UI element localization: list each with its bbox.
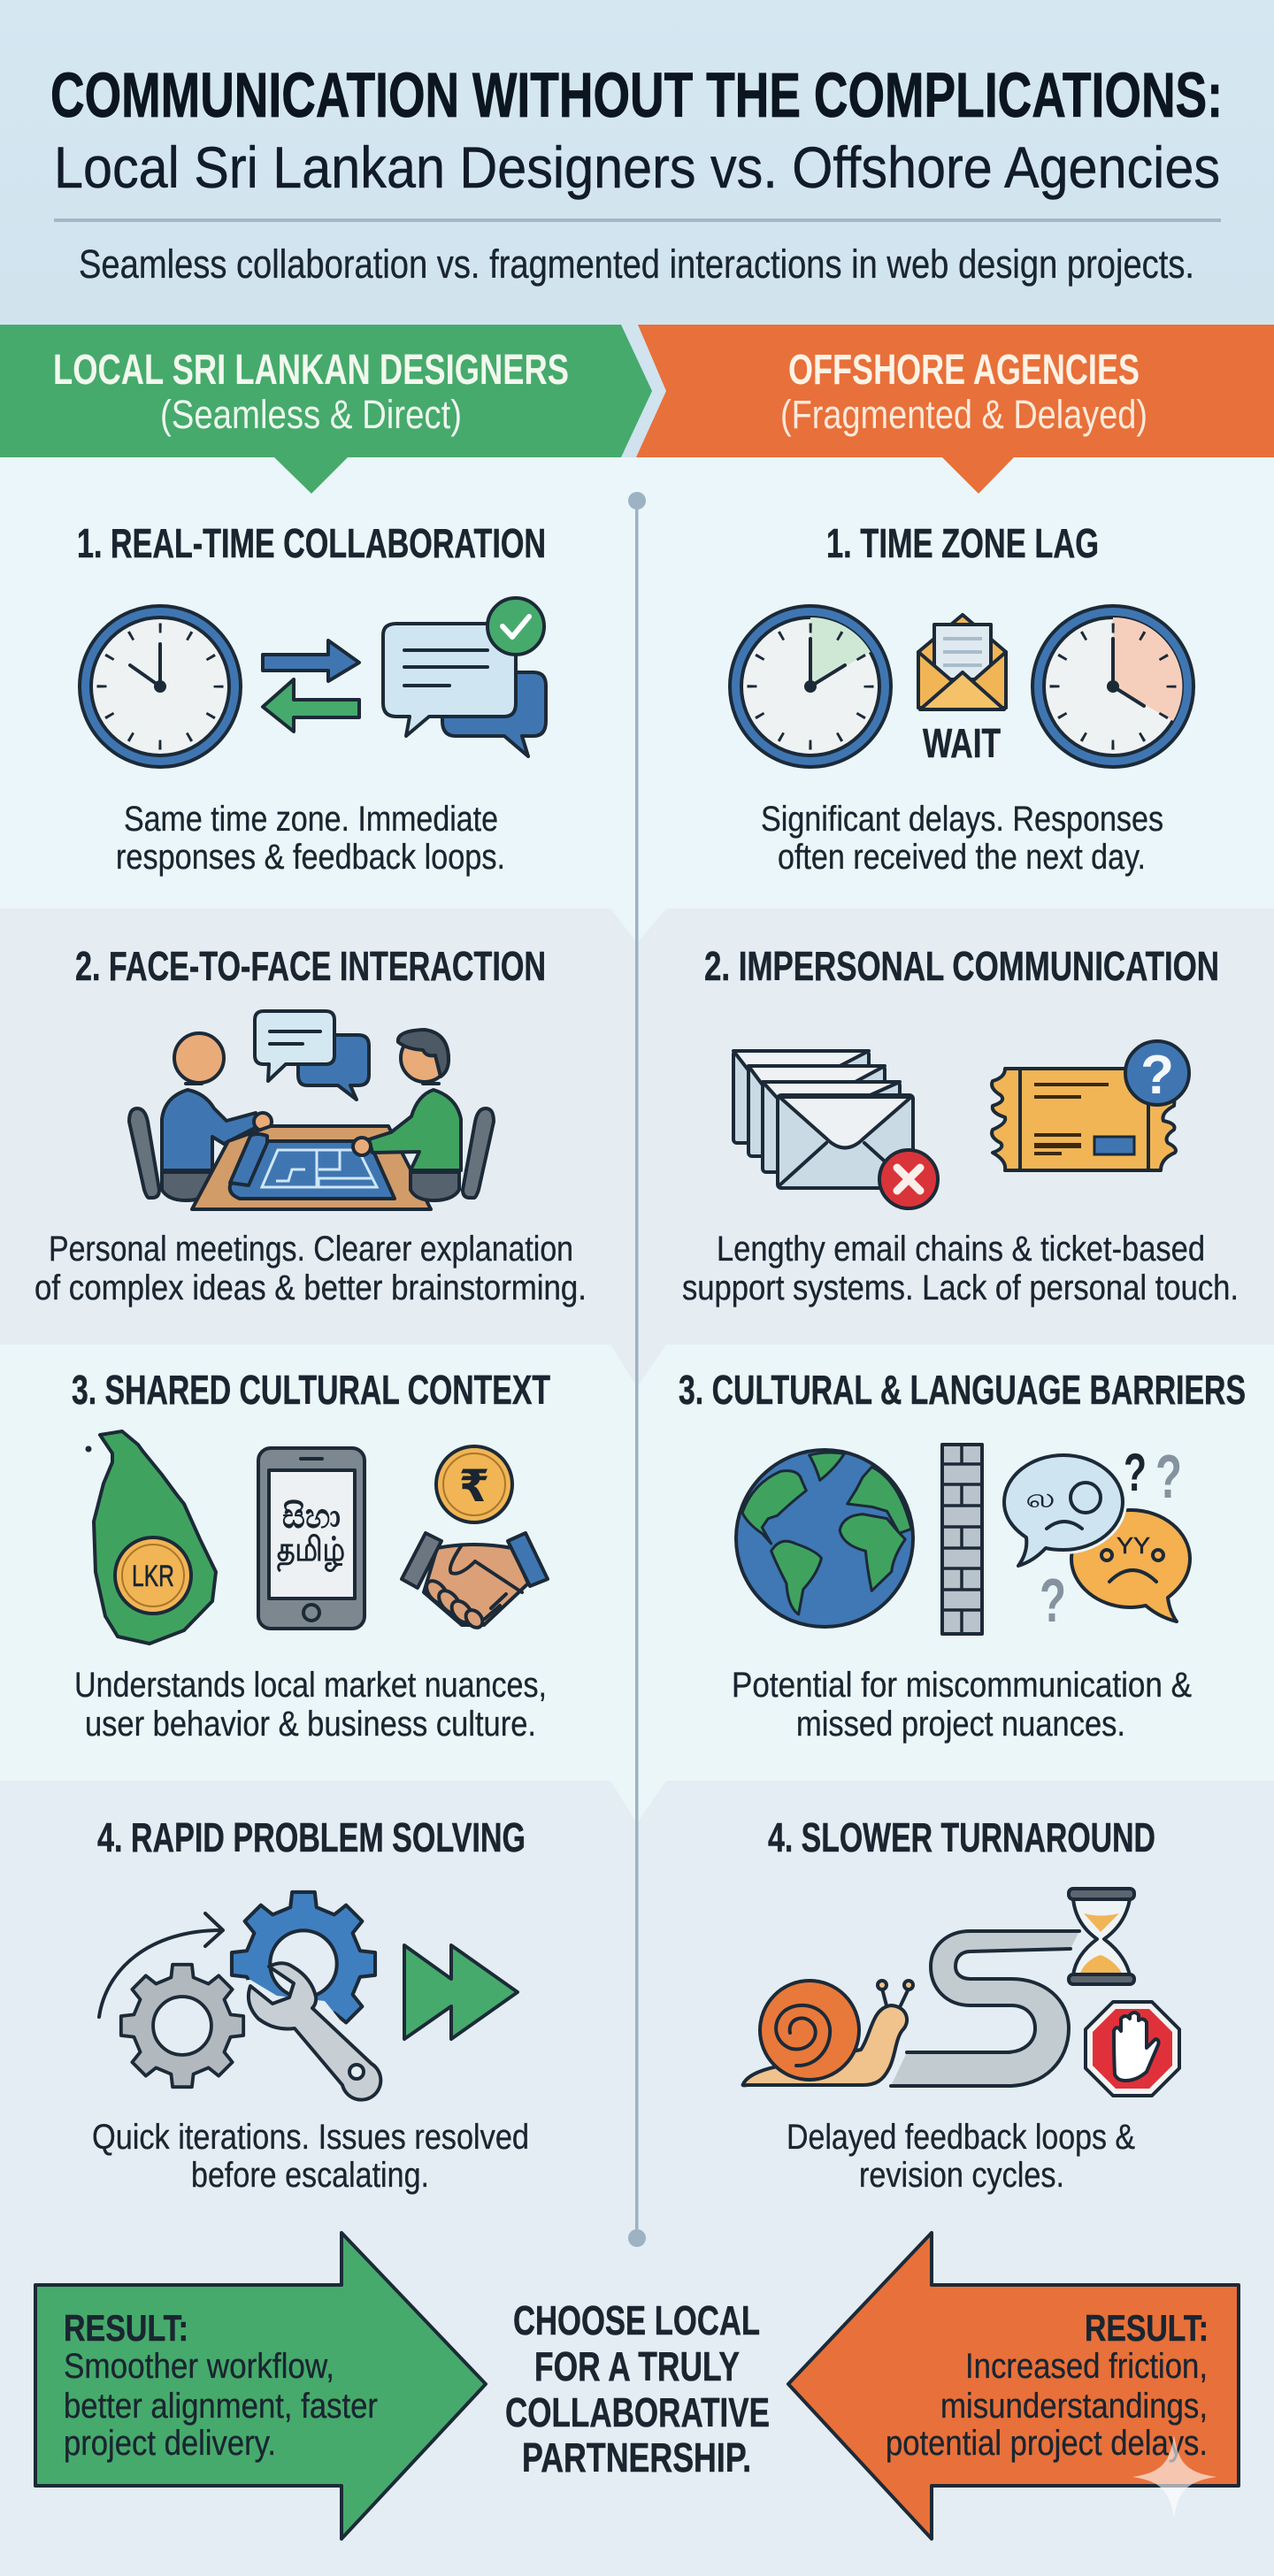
icon: grey gear	[121, 1965, 243, 2087]
icon: envelope	[918, 615, 1006, 709]
icon: curved arrow	[99, 1913, 223, 2017]
description	[732, 1666, 1192, 1744]
panel: impersonal communication	[682, 943, 1239, 1307]
panel: face-to-face interaction	[35, 943, 587, 1307]
icon: rupee coin: ₹	[459, 1461, 489, 1511]
icon: orange confused bubble	[1071, 1510, 1190, 1622]
icon: question badge: ?	[1140, 1045, 1174, 1106]
description: often received the next day.	[778, 838, 1146, 877]
banner: offshore agencies: (Fragmented & Delayed)	[780, 392, 1147, 437]
panel: time zone lag	[730, 520, 1193, 877]
callout: center call to action: COLLABORATIVE	[505, 2389, 770, 2435]
callout: center call to action: FOR A TRULY	[534, 2343, 740, 2389]
description: Same time zone. Immediate	[124, 800, 498, 839]
heading: 2. FACE-TO-FACE INTERACTION	[75, 943, 546, 989]
callout: green result arrow	[35, 2233, 486, 2539]
callout: green result arrow: Smoother workflow,	[64, 2347, 334, 2386]
right person	[353, 1030, 461, 1200]
icon: question marks	[1040, 1442, 1182, 1635]
callout: center call to action: CHOOSE LOCAL	[513, 2297, 760, 2343]
left person	[162, 1033, 272, 1200]
callout: green result arrow: better alignment, faster	[64, 2387, 378, 2426]
description: Personal meetings. Clearer explanation	[49, 1230, 573, 1269]
chairs	[129, 1108, 494, 1198]
icon: smartphone	[258, 1448, 365, 1629]
banner: local designers: (Seamless & Direct)	[160, 392, 462, 437]
banner: offshore agencies	[636, 325, 1274, 494]
callout: center call to action	[505, 2297, 770, 2480]
description: Potential for miscommunication &	[732, 1666, 1192, 1705]
description	[682, 1230, 1239, 1307]
icon: handshake	[402, 1533, 548, 1631]
icon: wrench	[249, 1963, 380, 2100]
icon: stop hand sign	[1086, 2002, 1179, 2096]
table with blueprint	[192, 1126, 431, 1209]
panel: shared cultural context	[72, 1367, 550, 1744]
panel: slower turnaround	[743, 1814, 1179, 2195]
callout: orange result arrow: RESULT:	[1085, 2307, 1209, 2349]
icon: question marks: ?	[1040, 1566, 1066, 1635]
description	[74, 1666, 547, 1744]
icon: support ticket	[992, 1069, 1176, 1170]
panel: cultural and language barriers	[679, 1367, 1246, 1744]
icon: rupee coin	[436, 1446, 512, 1522]
icon: winding road	[891, 1931, 1079, 2086]
description: Significant delays. Responses	[761, 800, 1163, 839]
callout: orange result arrow: potential project delays.	[886, 2424, 1208, 2463]
icon: question marks: ?	[1155, 1442, 1182, 1511]
center divider line	[628, 492, 646, 2247]
callout: orange result arrow: misunderstandings,	[940, 2387, 1208, 2426]
panel: rapid problem solving	[92, 1814, 529, 2195]
icon: brick wall	[942, 1445, 982, 1634]
icon: red x badge	[879, 1150, 938, 1208]
description: missed project nuances.	[796, 1705, 1125, 1744]
icon: blue gear	[230, 1892, 375, 2061]
icon: smartphone: සිහා	[282, 1499, 341, 1536]
heading: 1. REAL-TIME COLLABORATION	[77, 520, 546, 566]
description: of complex ideas & better brainstorming.	[35, 1269, 587, 1307]
description: user behavior & business culture.	[85, 1705, 536, 1744]
icon: sri lanka map	[85, 1431, 216, 1644]
callout: green result arrow: project delivery.	[64, 2424, 276, 2463]
description: responses & feedback loops.	[116, 838, 505, 877]
icon: sparkle watermark	[1132, 2435, 1216, 2518]
description: Quick iterations. Issues resolved	[92, 2118, 529, 2157]
description	[35, 1230, 587, 1307]
icon: clock	[80, 606, 241, 767]
icon: smartphone: தமிழ்	[277, 1531, 345, 1573]
icon: chat bubbles with check	[383, 598, 546, 756]
heading: 3. SHARED CULTURAL CONTEXT	[72, 1367, 550, 1413]
icon: hourglass	[1069, 1889, 1134, 1984]
icon: question badge	[1125, 1041, 1189, 1106]
description: revision cycles.	[859, 2156, 1064, 2195]
description: before escalating.	[191, 2156, 429, 2195]
description	[761, 800, 1163, 877]
wait label: WAIT	[923, 720, 1001, 766]
icon: clock morning	[730, 606, 891, 767]
icon: blue confused bubble	[1004, 1455, 1123, 1566]
icon: fast forward arrows	[404, 1945, 518, 2039]
icon: blue confused bubble: ல	[1025, 1484, 1055, 1514]
icon: meeting illustration	[129, 1011, 494, 1209]
banner: local designers: LOCAL SRI LANKAN DESIGNERS	[53, 347, 569, 394]
description: Delayed feedback loops &	[787, 2118, 1135, 2157]
callout: orange result arrow: Increased friction,	[965, 2347, 1208, 2386]
icon: globe	[736, 1450, 913, 1627]
icon: question marks: ?	[1124, 1443, 1147, 1502]
callout: orange result arrow	[788, 2233, 1239, 2539]
icon: sri lanka map: LKR	[132, 1560, 174, 1593]
icon: orange confused bubble: YY	[1117, 1532, 1150, 1559]
description: Lengthy email chains & ticket-based	[717, 1230, 1205, 1269]
title	[50, 61, 1223, 200]
banner: offshore agencies: OFFSHORE AGENCIES	[788, 347, 1140, 394]
description	[92, 2118, 529, 2195]
heading: 4. RAPID PROBLEM SOLVING	[97, 1814, 526, 1860]
icon: snail	[743, 1981, 913, 2085]
description: Understands local market nuances,	[74, 1666, 547, 1705]
callout: green result arrow: RESULT:	[64, 2307, 188, 2349]
speech bubbles	[255, 1011, 369, 1100]
description	[116, 800, 505, 877]
callout: center call to action: PARTNERSHIP.	[522, 2434, 751, 2480]
icon: exchange arrows	[263, 640, 359, 732]
description	[787, 2118, 1135, 2195]
heading: 1. TIME ZONE LAG	[826, 520, 1099, 566]
icon: clock afternoon	[1032, 606, 1193, 767]
banner: local designers	[0, 325, 652, 494]
icon: envelope stack	[733, 1051, 913, 1188]
panel: real-time collaboration	[77, 520, 546, 877]
